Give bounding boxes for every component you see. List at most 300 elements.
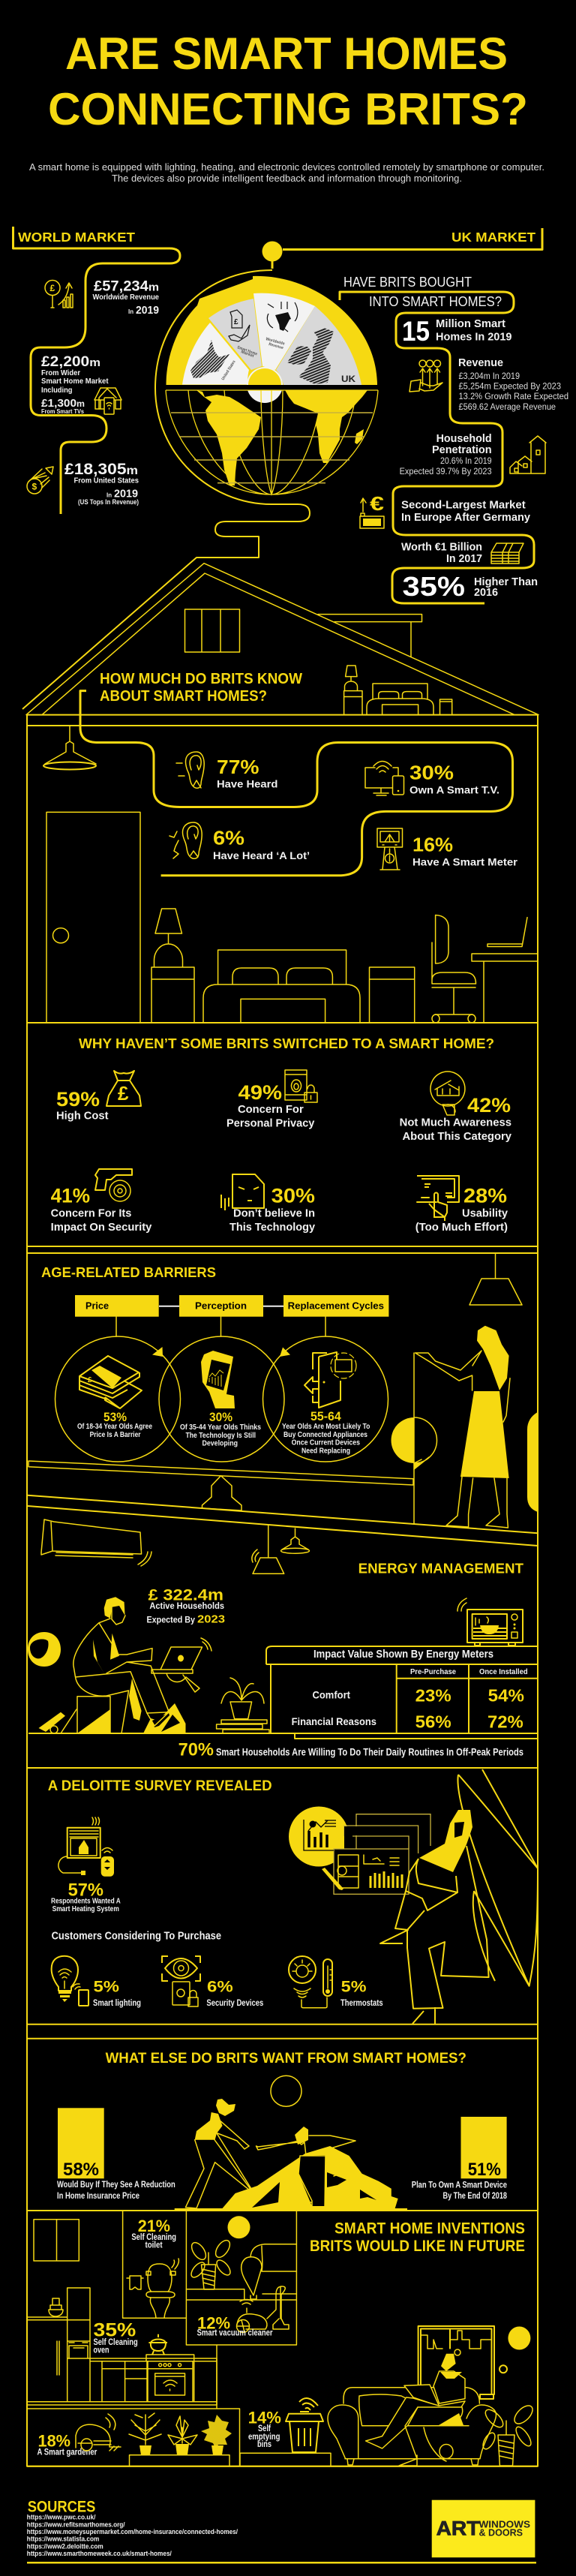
pot on stove — [148, 2334, 167, 2355]
stat: self emptying bins: bins — [257, 2440, 272, 2449]
yellow ring wall decoration — [28, 1632, 61, 1667]
woman skirt — [460, 1391, 509, 1478]
stat: 55-64: Once Current Devices — [292, 1438, 360, 1447]
stat: smart gardener: A Smart gardener — [38, 2448, 98, 2457]
stat: 28 percent usability: Usability — [462, 1207, 508, 1220]
man outline — [256, 2136, 356, 2208]
heading: have brits bought: INTO SMART HOMES? — [369, 294, 502, 309]
stat: 28 percent usability — [416, 1185, 508, 1234]
dial: upper half yellow ring — [166, 276, 377, 385]
island: madagascar — [355, 429, 364, 444]
intro text: The devices also provide intelligent feedback and information through monitoring. — [112, 173, 462, 184]
stat: 55-64 — [282, 1410, 370, 1456]
stat: wider smart home market — [41, 354, 109, 415]
stat: self emptying bins — [248, 2408, 281, 2449]
arrow: to perception from replacement — [280, 1348, 290, 1357]
woman outline — [185, 2121, 264, 2208]
icon: three houses — [510, 436, 546, 473]
stat: 53 percent: Of 18-34 Year Olds Agree — [77, 1422, 152, 1431]
circle: mower wheel — [81, 2439, 92, 2451]
plant on books — [217, 1678, 269, 1733]
stat: household penetration — [400, 432, 492, 476]
stat: 42 percent awareness: Not Much Awareness — [400, 1117, 512, 1129]
icon: smart bulb — [52, 1956, 88, 2006]
stat: 57 percent — [51, 1880, 121, 1913]
icon: smart tv and phone — [365, 761, 404, 795]
stat: 59 percent high cost — [56, 1088, 109, 1123]
panel: age-related barriers — [28, 1253, 538, 1574]
source links: https://www.refitsmarthomes.org/ — [27, 2520, 125, 2529]
stat: wider smart home market: £1,300m — [41, 397, 85, 410]
stat: worldwide revenue — [93, 279, 159, 317]
stat: 42 percent awareness: 42% — [467, 1094, 511, 1117]
dial sector: uk: UK — [341, 374, 356, 384]
label: 58 percent: In Home Insurance Price — [57, 2192, 140, 2201]
stat: 55-64: Buy Connected Appliances — [284, 1430, 368, 1439]
stat: 35 percent higher: 2016 — [474, 586, 498, 599]
dial hub — [247, 367, 283, 403]
stat: active households: Active Households — [149, 1601, 224, 1611]
stat: 55-64: 55-64 — [310, 1410, 341, 1423]
stat: 30 percent technology: 30% — [272, 1185, 315, 1207]
icon: tablet and pointing hand — [417, 1176, 459, 1221]
floor line — [27, 2210, 538, 2211]
stat: self cleaning toilet: 21% — [138, 2217, 170, 2235]
heading: smart home inventions: SMART HOME INVENTIONS — [334, 2220, 525, 2238]
icon: coin stack with arrow — [27, 467, 53, 494]
heading: have brits bought — [344, 275, 502, 309]
stat: 59 percent high cost: High Cost — [56, 1110, 109, 1123]
stat: smart lighting — [93, 1978, 141, 2008]
stat: smart lighting: 5% — [93, 1978, 119, 1995]
small ceiling lamp — [280, 1528, 309, 1553]
stat: worth one billion: In 2017 — [446, 552, 482, 565]
globe pin and arm — [272, 252, 273, 269]
stat: 35 percent higher — [402, 571, 538, 602]
table: impact value shown by energy meters: 23% — [416, 1685, 452, 1705]
plant beside sofa — [481, 2403, 536, 2466]
stat: 49 percent privacy: 49% — [238, 1081, 282, 1104]
stat: 16 percent: Have A Smart Meter — [412, 856, 518, 868]
tab: price: Price — [86, 1300, 109, 1312]
moon circle — [271, 2076, 302, 2106]
stat: revenue: £3,204m In 2019 — [459, 372, 520, 381]
stat: self cleaning oven — [93, 2319, 138, 2355]
icon: hand holding pound tag — [229, 310, 250, 341]
stat: 15 million smart homes: Million Smart — [436, 317, 506, 330]
stat: revenue: £5,254m Expected By 2023 — [459, 383, 561, 392]
icon: thermostat — [289, 1956, 332, 2008]
stat: household penetration: Penetration — [432, 443, 492, 456]
stat: security devices: Security Devices — [206, 1997, 264, 2008]
stat: 30 percent: Of 35-44 Year Olds Thinks — [180, 1423, 261, 1432]
icon: connected home network — [430, 1072, 465, 1115]
floor line — [27, 1022, 538, 1023]
stat: 77 percent: Have Heard — [217, 778, 278, 790]
icon: smart toilet — [127, 2259, 178, 2318]
heading: why haven't some brits switched: WHY HAVEN’T SOME BRITS SWITCHED TO A SMART HOME? — [79, 1036, 494, 1051]
kitchen — [27, 2288, 217, 2405]
attic window — [184, 609, 240, 652]
man torso accents — [93, 1634, 142, 1721]
icon: money stacks — [80, 1356, 142, 1408]
woman hair — [477, 1326, 509, 1390]
stat: second-largest market — [401, 498, 531, 524]
stat: 41 percent security: 41% — [51, 1185, 90, 1207]
table: impact value shown by energy meters: Once Installed — [479, 1667, 528, 1676]
stat: 49 percent privacy: Personal Privacy — [226, 1117, 315, 1130]
man hair — [104, 1597, 125, 1619]
stat: self cleaning toilet: Self Cleaning — [131, 2233, 176, 2242]
stat: 28 percent usability: 28% — [464, 1185, 507, 1207]
floor band — [27, 2024, 538, 2039]
heading: deloitte survey: A DELOITTE SURVEY REVEALED — [48, 1778, 272, 1794]
stat: self cleaning toilet — [131, 2217, 176, 2250]
stat: wider smart home market: Including — [41, 386, 72, 395]
stat: 30 percent technology — [230, 1185, 316, 1234]
intro text: A smart home is equipped with lighting, heating, and electronic devices controlled remotely by smartphone or computer. — [29, 161, 544, 173]
bar: 51 percent: 51% — [468, 2160, 501, 2180]
frame: uk market — [283, 228, 542, 249]
icon: eye scan and phone lock — [162, 1956, 200, 2006]
roof lines — [26, 564, 538, 715]
panel: smart home inventions — [27, 2211, 538, 2466]
stat: 55-64: Need Replacing — [302, 1447, 350, 1456]
title — [48, 29, 528, 134]
fridge and cabinets — [27, 2288, 217, 2405]
stat: smart lighting: Smart lighting — [93, 1997, 141, 2008]
stat: self cleaning oven: oven — [93, 2344, 110, 2355]
door — [46, 812, 140, 1023]
stat: self cleaning toilet: toilet — [146, 2241, 163, 2250]
stat: 77 percent — [217, 756, 278, 790]
house walls and floors — [27, 715, 538, 2466]
dial sector: worldwide revenue: Worldwide — [265, 337, 285, 347]
icon: smart bin — [240, 2398, 331, 2466]
stat: active households: Expected By — [147, 1614, 195, 1625]
stat: 30 percent technology: Don’t believe In — [233, 1207, 315, 1220]
stat: active households: £ 322.4m — [148, 1587, 224, 1604]
stat: household penetration: Household — [436, 432, 492, 445]
woman outline — [416, 1351, 510, 1528]
stat: 70 percent: 70% — [178, 1739, 214, 1760]
tab: replacement cycles — [284, 1295, 388, 1317]
stat: 6 percent — [213, 827, 310, 861]
stat: 42 percent awareness: About This Category — [402, 1130, 512, 1143]
icon: house with smart phone — [94, 388, 122, 414]
stat: 30 percent: The Technology Is Still — [186, 1431, 256, 1440]
stat: worldwide revenue: 2019 — [136, 304, 159, 317]
map: uk and ireland — [287, 328, 334, 384]
stat: self emptying bins: Self — [258, 2424, 271, 2433]
stat: security devices — [206, 1978, 264, 2008]
tab: perception — [179, 1295, 263, 1317]
sofa — [328, 2388, 496, 2465]
stat: self cleaning oven: Self Cleaning — [93, 2337, 138, 2347]
stat: 49 percent privacy — [226, 1081, 315, 1130]
globe lower half — [166, 390, 378, 494]
icon: pound coin with rising arrow — [45, 281, 73, 308]
panel: what else do brits want — [27, 2051, 538, 2211]
stat: 53 percent — [77, 1411, 152, 1439]
icon: money bag — [106, 1071, 141, 1106]
table: impact value shown by energy meters: Comfort — [312, 1688, 350, 1700]
room walls — [27, 2211, 296, 2466]
rock shapes under feet — [143, 1703, 186, 1733]
heading: how much do brits know: ABOUT SMART HOMES? — [100, 688, 267, 705]
title: CONNECTING BRITS? — [48, 84, 528, 134]
table: impact value shown by energy meters: 54% — [488, 1685, 524, 1705]
venn circles — [56, 1317, 388, 1462]
icon: smart meter — [377, 828, 402, 870]
source links: https://www.pwc.co.uk/ — [27, 2514, 96, 2522]
stat: 15 million smart homes: Homes In 2019 — [436, 331, 512, 344]
icon: euro and banknote — [360, 492, 384, 528]
man trousers — [298, 2155, 326, 2206]
bar: 51 percent — [460, 2117, 507, 2180]
stat: 42 percent awareness — [400, 1094, 512, 1143]
icon: ear — [176, 752, 204, 788]
sloped shelf and bracket — [28, 1461, 413, 1510]
tab: perception: Perception — [195, 1300, 247, 1312]
table: impact value shown by energy meters: Pre-Purchase — [410, 1667, 456, 1676]
wall socket ring — [500, 2365, 507, 2373]
stat: 30 percent: 30% — [209, 1411, 232, 1424]
connector between tabs — [159, 1306, 284, 1307]
dial sector: smart home market: Smart Home — [236, 345, 258, 356]
icon: ear with face — [170, 822, 202, 858]
stat: 15 million smart homes — [402, 316, 512, 347]
stat: thermostats: 5% — [341, 1978, 367, 1995]
dial sector: uk — [276, 306, 362, 385]
icon: euro and banknote: € — [370, 492, 384, 515]
subheading: customers considering to purchase: Customers Considering To Purchase — [52, 1929, 221, 1942]
panel: energy management — [27, 1562, 538, 1768]
stat: united states revenue: In — [106, 492, 112, 498]
source links: https://www.smarthomeweek.co.uk/smart-homes/ — [27, 2550, 172, 2558]
stat: united states revenue — [64, 461, 139, 506]
logo: art windows and doors: & DOORS — [478, 2526, 523, 2538]
icon: money stacks: £ — [88, 1376, 92, 1384]
stat: 53 percent: 53% — [104, 1411, 127, 1424]
dial sector: smart home market: £ — [234, 318, 238, 326]
label: 58 percent — [57, 2181, 176, 2201]
stat: 16 percent: 16% — [412, 833, 453, 855]
plant on stand — [186, 2238, 244, 2300]
door knob — [52, 928, 69, 943]
stat: 70 percent — [178, 1739, 524, 1760]
stat: united states revenue: From United States — [74, 476, 139, 485]
stat: household penetration: 20.6% In 2019 — [440, 457, 492, 466]
table: impact value shown by energy meters: 56% — [416, 1712, 452, 1732]
icon: phone with fingerprint and lock — [285, 1070, 317, 1102]
dial sector: smart home market: Market — [240, 350, 254, 359]
stat: 30 percent technology: This Technology — [230, 1221, 316, 1234]
stat: 57 percent: Respondents Wanted A — [51, 1897, 121, 1906]
source links — [27, 2514, 238, 2558]
panel: house roof and attic — [26, 564, 538, 2466]
stat: active households: 2023 — [197, 1613, 225, 1626]
stat: 77 percent: 77% — [217, 756, 260, 778]
globe stand arc leading to the roof — [22, 270, 310, 709]
dial sector: worldwide revenue — [254, 293, 315, 370]
panel: uk market — [283, 228, 568, 603]
icon: coin stack with arrow: $ — [32, 482, 38, 492]
illustration: man with laptop — [39, 1597, 212, 1733]
hair — [441, 2354, 456, 2371]
yellow wall piece — [527, 1412, 538, 1512]
window with skyline — [418, 2326, 494, 2399]
stat: 30 percent smart tv — [410, 762, 500, 796]
heading: what else do brits want: WHAT ELSE DO BRITS WANT FROM SMART HOMES? — [106, 2051, 466, 2067]
intro text — [29, 161, 544, 184]
tab: replacement cycles: Replacement Cycles — [288, 1300, 384, 1312]
stat: active households — [147, 1587, 225, 1626]
heading: uk market: UK MARKET — [452, 230, 536, 245]
stat: revenue — [458, 356, 568, 412]
stat: revenue: 13.2% Growth Rate Expected — [459, 392, 568, 401]
stat: 16 percent — [412, 833, 518, 868]
stat: 35 percent higher: Higher Than — [474, 576, 538, 588]
connector line: world market — [14, 227, 180, 514]
ball — [440, 2445, 453, 2458]
panel: how much do brits know — [27, 691, 538, 1023]
ground line — [175, 2208, 407, 2210]
icon: stack of money — [491, 543, 524, 564]
desk chair — [432, 915, 476, 1014]
icon: cash with arrows — [267, 302, 298, 332]
stat: second-largest market: Second-Largest Market — [401, 498, 526, 512]
stat: smart vacuum cleaner: 12% — [197, 2313, 230, 2332]
jar on shelf — [49, 2298, 63, 2316]
floor band — [27, 1246, 538, 1253]
stat: self emptying bins: emptying — [248, 2433, 280, 2442]
source links: https://www2.deloitte.com — [27, 2542, 104, 2550]
stat: smart vacuum cleaner: Smart vacuum cleaner — [197, 2329, 273, 2338]
stat: revenue: £569.62 Average Revenue — [459, 403, 556, 412]
heading: age-related barriers: AGE-RELATED BARRIERS — [41, 1265, 216, 1280]
pendant lamp — [45, 726, 96, 764]
stat: 49 percent privacy: Concern For — [238, 1103, 304, 1116]
stat: 35 percent higher: 35% — [402, 571, 465, 602]
title: ARE SMART HOMES — [65, 29, 508, 79]
stool — [77, 1697, 110, 1733]
bar: 58 percent: 58% — [63, 2160, 99, 2180]
table: impact value shown by energy meters: Impact Value Shown By Energy Meters — [314, 1649, 494, 1661]
stat: 41 percent security — [51, 1185, 152, 1234]
stat: 6 percent: Have Heard ‘A Lot’ — [213, 849, 310, 861]
continent: africa — [285, 390, 368, 463]
stat: smart vacuum cleaner — [197, 2313, 273, 2338]
heading: sources: SOURCES — [28, 2499, 95, 2516]
bar: 58 percent — [58, 2108, 104, 2180]
desk with laptop — [472, 918, 538, 1023]
heading: how much do brits know: HOW MUCH DO BRITS KNOW — [100, 671, 302, 687]
panel: deloitte survey — [27, 1769, 538, 2039]
table: impact value shown by energy meters: 72% — [488, 1712, 524, 1732]
icon: smart heating system — [58, 1817, 114, 1877]
logo: art windows and doors: ART — [436, 2517, 480, 2539]
yellow lamp circle — [508, 2326, 530, 2350]
stat: household penetration: Expected 39.7% By 2023 — [400, 467, 492, 476]
stat: thermostats — [340, 1978, 383, 2008]
stat: second-largest market: In Europe After Germany — [401, 511, 531, 524]
stat: 41 percent security: Impact On Security — [51, 1221, 152, 1234]
stat: thermostats: Thermostats — [340, 1997, 383, 2008]
logo: art windows and doors: WINDOWS — [478, 2518, 530, 2529]
laptop — [152, 1638, 212, 1692]
sloped floor lines — [28, 1495, 538, 1546]
stat: worldwide revenue: Worldwide Revenue — [93, 293, 159, 302]
man outline — [74, 1607, 169, 1733]
stat: security devices: 6% — [207, 1978, 233, 1995]
stat: 28 percent usability: (Too Much Effort) — [416, 1221, 508, 1234]
city skyline — [421, 2331, 490, 2349]
heading: have brits bought: HAVE BRITS BOUGHT — [344, 275, 472, 290]
torso — [434, 2371, 465, 2403]
panel: globe — [22, 242, 382, 709]
stat: 6 percent: 6% — [213, 827, 244, 849]
man head — [295, 2127, 308, 2145]
dial sector: worldwide revenue: Revenue — [268, 342, 284, 350]
yellow mound — [222, 2146, 398, 2208]
stat: 15 million smart homes: 15 — [402, 316, 430, 347]
stat: wider smart home market: From Smart TVs — [41, 408, 85, 415]
panel: world market — [14, 227, 180, 514]
potted plants on stand — [129, 2413, 232, 2466]
illustration: two people moving a blanket — [175, 2099, 407, 2209]
icon: hand holding phone — [201, 1351, 235, 1408]
ceiling lamp — [470, 1253, 522, 1305]
heading: how much do brits know — [100, 671, 302, 705]
icon: gun and target — [95, 1169, 132, 1201]
table: impact value shown by energy meters — [266, 1646, 538, 1733]
map: united states — [190, 340, 230, 378]
kitchen window — [34, 2220, 79, 2261]
illustration: charts panel — [289, 1807, 430, 1894]
chimney — [318, 615, 422, 657]
icon: document with sad face and sliders — [221, 1174, 264, 1210]
dial sector: smart home market — [208, 299, 262, 370]
stat: worldwide revenue: In — [128, 308, 134, 315]
stat: worldwide revenue: £57,234 m — [94, 279, 159, 294]
stat: 53 percent: Price Is A Barrier — [90, 1430, 141, 1439]
air conditioner — [41, 1519, 152, 1566]
stat: 30 percent smart tv: 30% — [410, 762, 454, 784]
woman hair — [419, 1810, 472, 1872]
stat: 30 percent smart tv: Own A Smart T.V. — [410, 784, 500, 796]
icon: door with appliance cycle — [304, 1352, 356, 1408]
stat: worth one billion: Worth €1 Billion — [401, 541, 482, 554]
stat: worth one billion — [401, 541, 482, 565]
stat: united states revenue: £18,305 m — [64, 461, 138, 478]
stat: self emptying bins: 14% — [248, 2408, 281, 2427]
stat: 30 percent: Developing — [202, 1439, 238, 1448]
floor tube — [39, 1709, 76, 1733]
table: impact value shown by energy meters: Financial Reasons — [292, 1715, 376, 1727]
stat: smart gardener: 18% — [38, 2432, 70, 2451]
stat: 57 percent: 57% — [68, 1880, 104, 1901]
bedroom furniture — [152, 909, 538, 1023]
stat: 41 percent security: Concern For Its — [51, 1207, 131, 1220]
heading: world market: WORLD MARKET — [18, 230, 135, 245]
stat: wider smart home market: £2,200 m — [41, 354, 100, 370]
stat: 55-64: Year Olds Are Most Likely To — [282, 1422, 370, 1431]
connector line: knowledge stats — [80, 691, 513, 876]
attic bedroom furniture — [344, 666, 452, 715]
dial sector: united states: United States — [221, 359, 237, 381]
source links: https://www.moneysupermarket.com/home-insurance/connected-homes/ — [27, 2528, 238, 2536]
